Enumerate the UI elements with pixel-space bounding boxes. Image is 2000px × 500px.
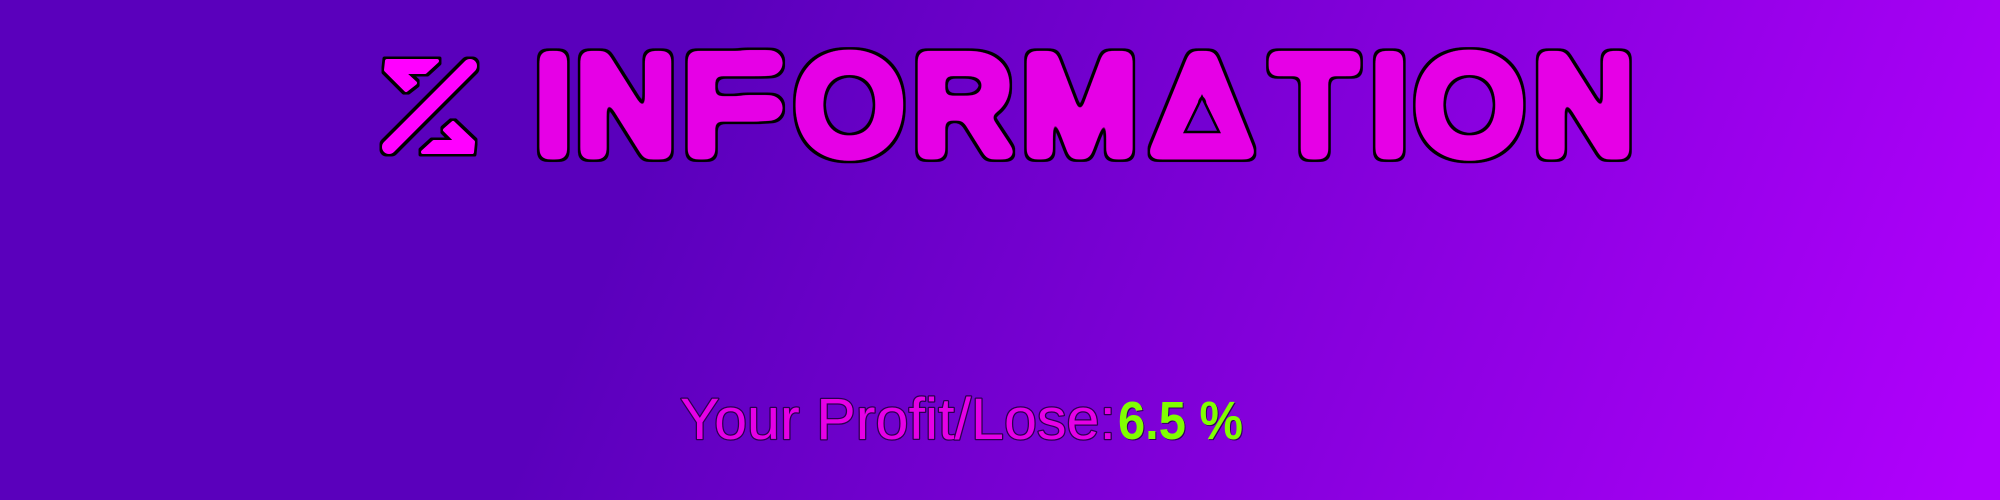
- profit label: Your Profit/Lose:: [680, 387, 1116, 452]
- icon: percent arrows: [386, 61, 473, 152]
- profit and loss line: [680, 387, 1243, 452]
- title letter A counter: [1185, 97, 1219, 132]
- profit value: 6.5 %: [1118, 391, 1243, 451]
- title: INFORMATION: [534, 29, 1633, 181]
